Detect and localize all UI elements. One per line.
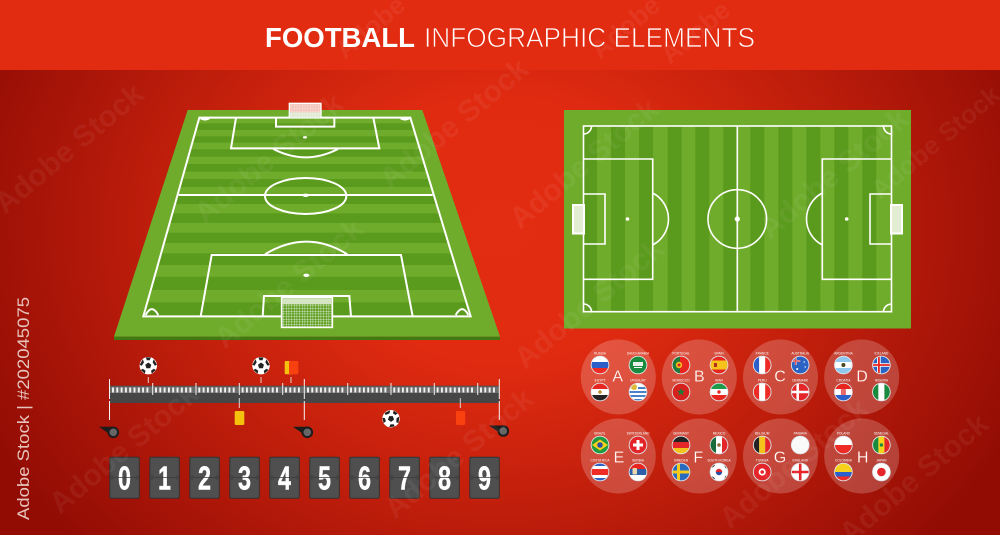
flag: Croatia: CROATIA [836,378,851,382]
flag: Mexico: MEXICO [713,432,726,436]
group B [662,340,737,414]
pitch markings [143,118,471,316]
flag: Australia: AUSTRALIA [791,352,810,356]
flag: France: FRANCE [756,352,769,356]
flag: Japan: JAPAN [876,458,887,462]
group D [824,340,899,414]
pitch side edge [114,337,500,340]
pitch markings [584,126,892,312]
digit 5: 5 [318,460,331,497]
digit 2 [189,457,220,498]
title: FOOTBALL [265,22,415,53]
flag: Colombia: COLOMBIA [835,458,853,462]
digit 0: 0 [118,460,131,497]
icon: ball 3 [379,407,403,431]
flag: Costa Rica: COSTA RICA [590,458,610,462]
group G [743,418,818,494]
flag: Senegal: SENEGAL [874,432,889,436]
stock id vertical text: Adobe Stock | #202045075 [15,297,33,520]
group F: F [693,450,703,467]
flag: Belgium: BELGIUM [755,432,770,436]
group H: H [857,450,868,467]
icon: whistle 1 [99,426,119,438]
flag: Peru: PERU [758,378,767,382]
flag: Sweden: SWEDEN [674,458,689,462]
flag: Spain: SPAIN [714,352,724,356]
title: INFOGRAPHIC ELEMENTS [424,22,755,53]
left goal [573,205,584,234]
group E: E [614,450,624,467]
icon: whistle 2 [293,426,313,438]
stock watermark: Adobe Stock [508,232,670,375]
top-down pitch [564,110,911,328]
group D: D [856,368,868,386]
flag: Russia: RUSSIA [594,352,607,356]
header band [0,0,1000,70]
flag: Poland: POLAND [837,432,851,436]
spots [626,216,848,222]
stock watermark: Adobe Stock [503,92,665,235]
group A: A [612,368,623,386]
half markers [110,379,499,420]
group A [581,340,656,414]
major ticks [153,383,478,395]
digit 0 [109,457,140,498]
flag: Panama: PANAMA [794,432,808,436]
stock watermark: Adobe Stock [188,87,350,230]
digit 4 [269,457,300,498]
stock watermark: Adobe Stock [378,382,540,525]
mowing stripes [583,126,876,312]
penalty and centre spots [302,136,309,277]
flag: Portugal: PORTUGAL [672,352,690,356]
stock watermark: Adobe Stock [713,392,875,535]
group E [581,418,656,494]
far goal [289,103,321,118]
flag: Switzerland: SWITZERLAND [627,432,650,436]
mowing stripes [144,124,470,316]
flag: Serbia: SERBIA [632,458,645,462]
icon: ball 1 [140,357,157,374]
group H [824,418,899,494]
digit 3 [229,457,260,498]
digit 8 [429,457,460,498]
match timeline [99,357,509,438]
icon: whistle 3 [489,425,509,437]
pitch surface [564,110,911,328]
icon: yellow card [235,411,244,425]
flag: Argentina: ARGENTINA [834,352,854,356]
stock watermark: Adobe Stock [753,102,915,245]
flag: Egypt: EGYPT [595,378,605,382]
flag: England: ENGLAND [792,458,809,462]
icon: yellow and red cards [285,361,298,374]
digit 9: 9 [478,460,491,497]
group B: B [694,368,705,386]
stock watermark: Adobe Stock [208,212,370,355]
group C: C [774,368,786,386]
digit 3: 3 [238,460,251,497]
minor ticks [113,388,494,392]
flag: Nigeria: NIGERIA [875,378,889,382]
flag: South Korea: SOUTH KOREA [707,458,731,462]
digit 1 [149,457,180,498]
event stems [148,377,460,408]
stock watermark: Adobe Stock [373,52,535,195]
perspective pitch [110,103,510,340]
flag: Germany: GERMANY [673,432,690,436]
icon: ball 2 [252,357,270,374]
digit 1: 1 [158,460,171,497]
stock watermark: Adobe Stock [43,377,205,520]
icon: red card [456,411,465,425]
pitch surface [114,110,500,337]
near goal [282,297,332,327]
digit 4: 4 [278,460,291,497]
digit 6 [349,457,380,498]
flag: Iran: IRAN [715,378,724,382]
right goal [891,205,902,234]
title [265,22,755,53]
group C [743,340,818,414]
flag: Brazil: BRAZIL [594,432,606,436]
flag: Iceland: ICELAND [874,352,889,356]
digit 7: 7 [398,460,411,497]
flag: Saudi Arabia: SAUDI ARABIA [627,352,650,356]
flag: Tunisia: TUNISIA [756,458,769,462]
group F [662,418,737,494]
digit 8: 8 [438,460,451,497]
digit 5 [309,457,340,498]
flip counter digits [109,457,500,498]
digit 7 [389,457,420,498]
digit 6: 6 [358,460,371,497]
flag: Denmark: DENMARK [792,378,809,382]
flag: Uruguay: URUGUAY [630,378,647,382]
group G: G [774,450,786,467]
digit 9 [469,457,500,498]
timeline bar [110,386,500,403]
digit 2: 2 [198,460,211,497]
flag: Morocco: MOROCCO [672,378,690,382]
